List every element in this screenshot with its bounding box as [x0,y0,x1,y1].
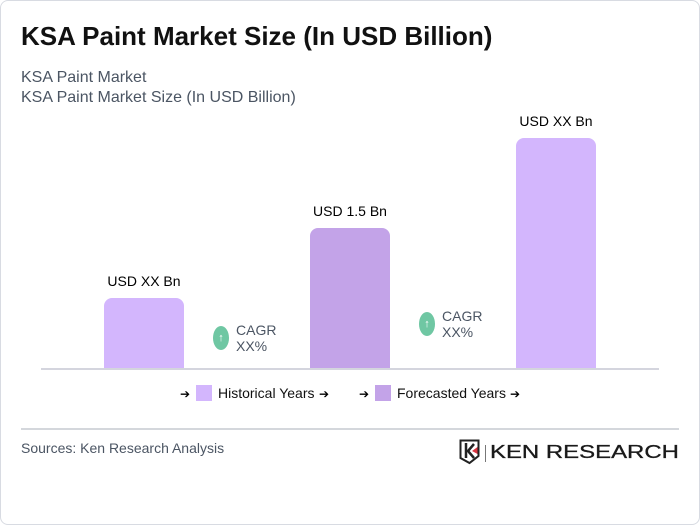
legend arrow: ➔ [510,387,520,401]
legend swatch: historical [196,385,212,401]
logo: Ken Research [460,440,679,464]
CAGR text 2: XX% [442,324,473,340]
legend arrow: ➔ [359,387,369,401]
CAGR text 2: CAGR [442,308,482,324]
footer divider [21,428,679,430]
subtitle: KSA Paint Market Size (In USD Billion) [21,89,296,106]
icon: up arrow [213,326,229,350]
legend swatch: forecasted [375,385,391,401]
subtitle [21,69,296,106]
bar label: forecast: USD XX Bn [519,113,593,129]
bar chart [41,113,659,370]
title: KSA Paint Market Size (In USD Billion) [21,21,492,51]
legend arrow: ➔ [180,387,190,401]
CAGR text 1 [236,322,276,354]
bar: middle [310,228,390,368]
CAGR text 2 [442,308,482,340]
legend text: forecasted: Forecasted Years [397,385,506,401]
subtitle: KSA Paint Market [21,69,146,86]
source note: Sources: Ken Research Analysis [21,440,224,456]
logo separator [485,445,486,462]
bar: historical [104,298,184,368]
CAGR badge 2 [419,308,482,340]
CAGR text 1: XX% [236,338,267,354]
legend text: historical: Historical Years [218,385,314,401]
CAGR text 1: CAGR [236,322,276,338]
icon: up arrow: ↑ [424,318,430,330]
legend arrow: ➔ [319,387,329,401]
CAGR badge 1 [213,322,276,354]
icon: up arrow [419,312,435,336]
bar label: historical: USD XX Bn [107,273,181,289]
axis line [41,368,659,370]
legend [180,385,520,401]
bar: forecast [516,138,596,368]
icon: up arrow: ↑ [218,332,224,344]
bar label: middle: USD 1.5 Bn [313,203,387,219]
logo wordmark: KEN RESEARCH [490,442,679,462]
icon: shield K [460,440,480,464]
